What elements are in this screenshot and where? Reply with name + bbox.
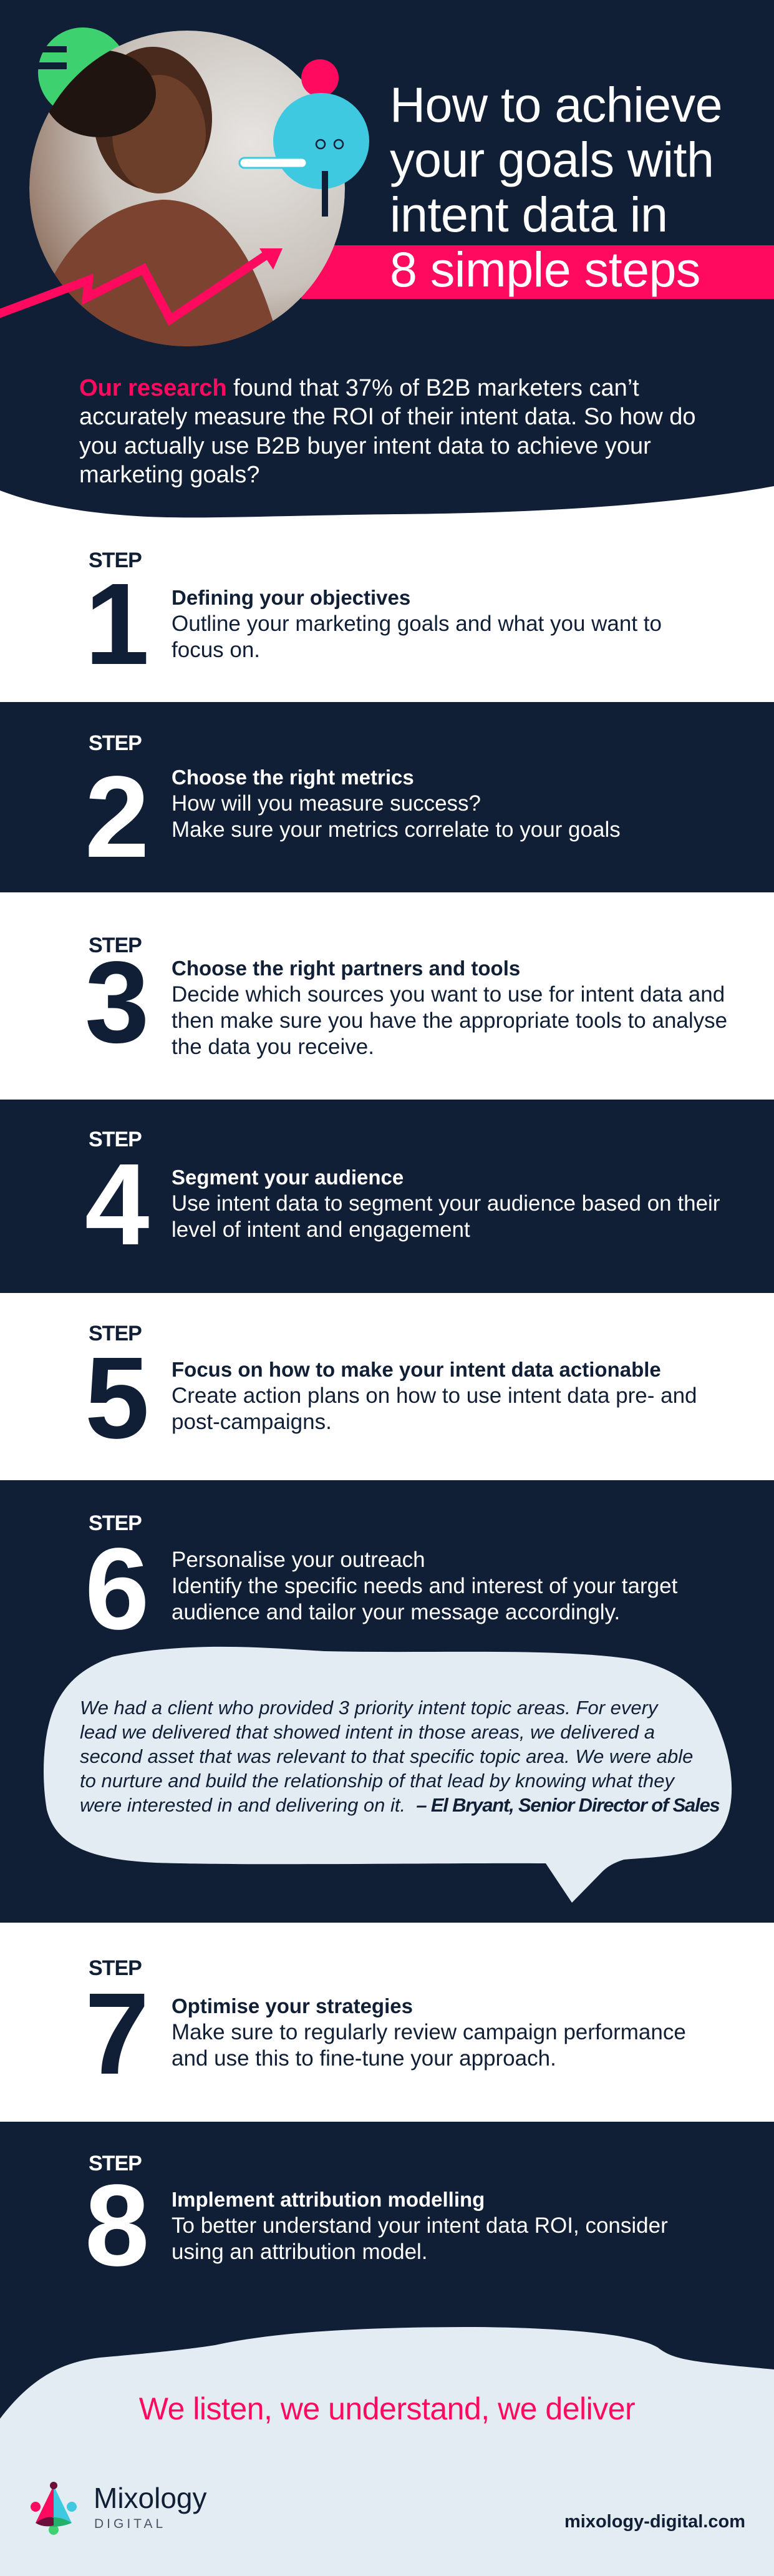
step 4: Use intent data to segment your audience based on their — [172, 1191, 720, 1216]
step 1: STEP — [89, 549, 142, 572]
step 8: using an attribution model. — [172, 2240, 428, 2264]
title: your goals with — [390, 132, 714, 187]
intro text: Our research found that 37% of B2B marketers can’t — [79, 375, 639, 401]
step 1: Outline your marketing goals and what you want to — [172, 612, 662, 636]
step 2 — [0, 702, 774, 892]
step 4: level of intent and engagement — [172, 1217, 470, 1242]
green circle — [38, 27, 128, 117]
quote text: We had a client who provided 3 priority intent topic areas. For every — [80, 1697, 657, 1719]
quote text: were interested in and delivering on it. – El Bryant, Senior Director of Sales — [80, 1794, 720, 1816]
intro text: accurately measure the ROI of their intent data. So how do — [79, 404, 696, 430]
step 7: 7 — [85, 1969, 147, 2099]
pink dot — [301, 59, 339, 97]
quote text: to nurture and build the relationship of that lead by knowing what they — [80, 1770, 674, 1792]
step 2: 2 — [85, 753, 147, 882]
intro text: you actually use B2B buyer intent data to achieve your — [79, 433, 651, 459]
step 1: Defining your objectives — [172, 586, 410, 609]
website url: mixology-digital.com — [564, 2512, 745, 2532]
hero illustration — [0, 27, 369, 346]
step 3 — [85, 934, 727, 1067]
step 7: Make sure to regularly review campaign performance — [172, 2020, 686, 2044]
step 1: 1 — [85, 560, 147, 689]
step 6 with quote: Personalise your outreach — [172, 1548, 425, 1572]
logo: DIGITAL — [94, 2517, 166, 2531]
step 3: Decide which sources you want to use for intent data and — [172, 982, 725, 1007]
step 3: then make sure you have the appropriate tools to analyse — [172, 1008, 727, 1033]
title — [390, 77, 722, 297]
step 2: Choose the right metrics — [172, 766, 414, 789]
step 6 with quote: 6 — [85, 1525, 147, 1654]
quote text: lead we delivered that showed intent in those areas, we delivered a — [80, 1721, 655, 1743]
dark bars — [34, 46, 67, 52]
title: How to achieve — [390, 77, 722, 132]
step 2: How will you measure success? — [172, 791, 481, 816]
quote text: second asset that was relevant to that specific topic area. We were able — [80, 1745, 693, 1767]
step 4: STEP — [89, 1128, 142, 1151]
step 2: Make sure your metrics correlate to your goals — [172, 817, 621, 842]
step 3: 3 — [85, 938, 147, 1067]
step 7 — [85, 1956, 686, 2099]
pink zigzag arrow — [0, 256, 265, 320]
step 3: the data you receive. — [172, 1035, 374, 1059]
intro text: marketing goals? — [79, 462, 259, 488]
step 4 — [0, 1100, 774, 1293]
step 6 with quote: Identify the specific needs and interest of your target — [172, 1574, 677, 1598]
title: intent data in — [390, 187, 667, 242]
tagline: We listen, we understand, we deliver — [139, 2391, 635, 2426]
step 8: To better understand your intent data ROI, consider — [172, 2213, 668, 2238]
step 4: Segment your audience — [172, 1166, 404, 1189]
logo: Mixology — [94, 2482, 207, 2514]
cyan face — [239, 93, 369, 217]
intro text — [79, 375, 696, 488]
icon: logo mark — [31, 2482, 77, 2535]
step 7: STEP — [89, 1956, 142, 1980]
step 4: 4 — [85, 1140, 147, 1269]
photo circle — [25, 31, 345, 374]
step 7: Optimise your strategies — [172, 1994, 413, 2017]
step 8: 8 — [85, 2161, 147, 2290]
step 6 with quote: STEP — [89, 1511, 142, 1535]
step 5: Create action plans on how to use intent data pre- and — [172, 1383, 697, 1408]
logo — [31, 2482, 207, 2535]
step 5: Focus on how to make your intent data actionable — [172, 1358, 661, 1381]
step 7: and use this to fine-tune your approach. — [172, 2046, 556, 2071]
footer wave — [0, 2327, 774, 2576]
step 5: post-campaigns. — [172, 1410, 332, 1434]
step 2: STEP — [89, 731, 142, 755]
step 6 with quote: audience and tailor your message accordingly. — [172, 1600, 620, 1624]
step 3: Choose the right partners and tools — [172, 957, 520, 980]
step 8: STEP — [89, 2152, 142, 2175]
step 5: 5 — [85, 1334, 147, 1463]
step 3: STEP — [89, 934, 142, 957]
header background — [0, 0, 774, 518]
step 6 with quote — [0, 1480, 774, 1923]
pink title bar — [301, 245, 774, 299]
quote bubble — [44, 1646, 732, 1903]
step 8 — [0, 2122, 774, 2576]
step 5: STEP — [89, 1322, 142, 1345]
step 8: Implement attribution modelling — [172, 2188, 485, 2211]
step 5 — [85, 1322, 697, 1463]
step 1 — [85, 549, 662, 689]
title: 8 simple steps — [390, 242, 700, 297]
quote text — [80, 1697, 720, 1816]
step 1: focus on. — [172, 638, 260, 662]
